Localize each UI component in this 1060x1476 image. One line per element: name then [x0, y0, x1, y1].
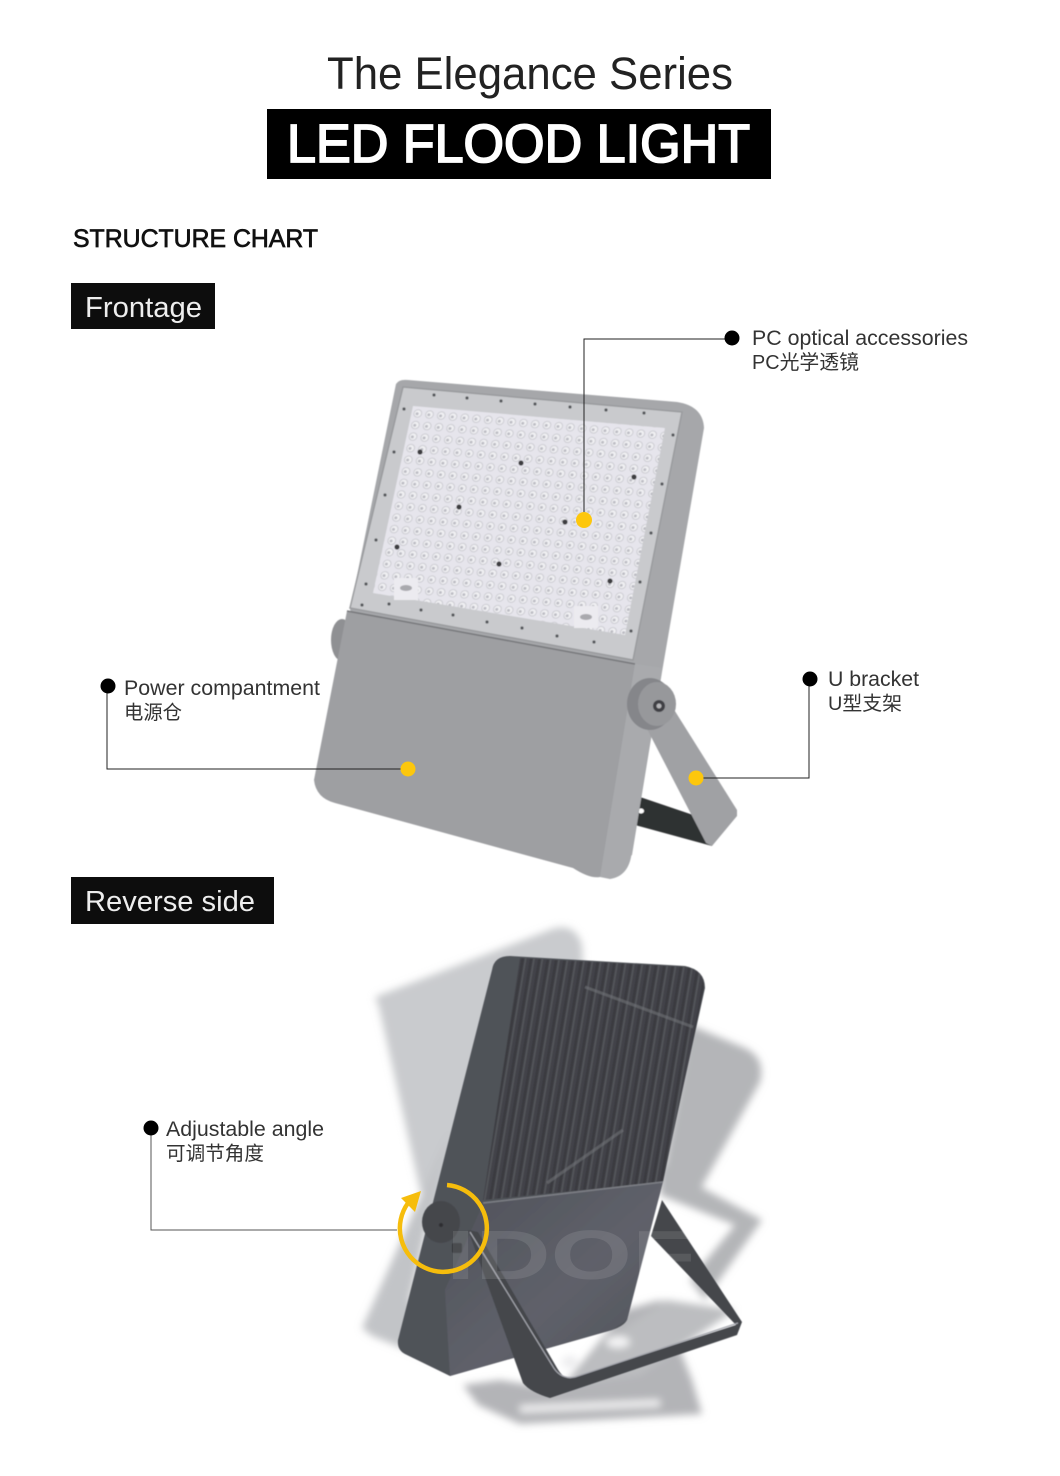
U bracket — [468, 1200, 742, 1398]
product photo: front of flood light — [314, 380, 737, 879]
lens frame — [350, 387, 682, 660]
dark LED spots — [394, 449, 637, 584]
U bracket arm — [645, 700, 737, 846]
section label: Reverse side: Reverse side — [85, 886, 255, 918]
blurred lens marks — [394, 578, 598, 628]
callout: PC optical accessories: PC optical accessories — [752, 327, 968, 350]
callout: adjustable angle — [144, 1118, 397, 1230]
heading: structure chart: STRUCTURE CHART — [73, 225, 318, 253]
callout: U bracket: U bracket — [828, 668, 919, 691]
pivot knob — [422, 1201, 460, 1243]
icon: yellow rotation arrow — [400, 1185, 487, 1272]
heat sink fins — [483, 958, 704, 1200]
callout: PC optical accessories: PC光学透镜 — [752, 351, 859, 374]
power compartment — [314, 611, 635, 877]
frame screws — [360, 393, 675, 644]
callout: adjustable angle: Adjustable angle — [166, 1118, 324, 1141]
callout: power compartment: 电源仓 — [124, 702, 182, 724]
callout: power compartment — [100, 677, 416, 776]
section label: Reverse side — [71, 877, 274, 924]
banner: LED FLOOD LIGHT: LED FLOOD LIGHT — [287, 114, 750, 174]
callout: U bracket — [688, 668, 919, 786]
rear knob — [331, 619, 353, 661]
title: The Elegance Series — [327, 48, 733, 99]
LED panel — [373, 406, 665, 635]
section label: Frontage — [71, 283, 215, 329]
callout: PC optical accessories — [576, 327, 968, 528]
body frame — [350, 380, 704, 877]
callout: adjustable angle: 可调节角度 — [166, 1143, 264, 1165]
housing — [398, 956, 705, 1376]
callout: U bracket: U型支架 — [828, 693, 902, 715]
product photo: reverse of flood light with rotation ghosts — [362, 927, 762, 1424]
rotation ghosts — [362, 927, 762, 1424]
fin reflections — [547, 987, 693, 1183]
callout: power compartment: Power compantment — [124, 677, 320, 700]
section label: Frontage: Frontage — [85, 292, 202, 324]
lower compartment — [445, 1182, 663, 1376]
back bracket — [635, 797, 712, 846]
watermark: IDOF — [446, 1216, 696, 1294]
pivot knob — [627, 678, 676, 730]
